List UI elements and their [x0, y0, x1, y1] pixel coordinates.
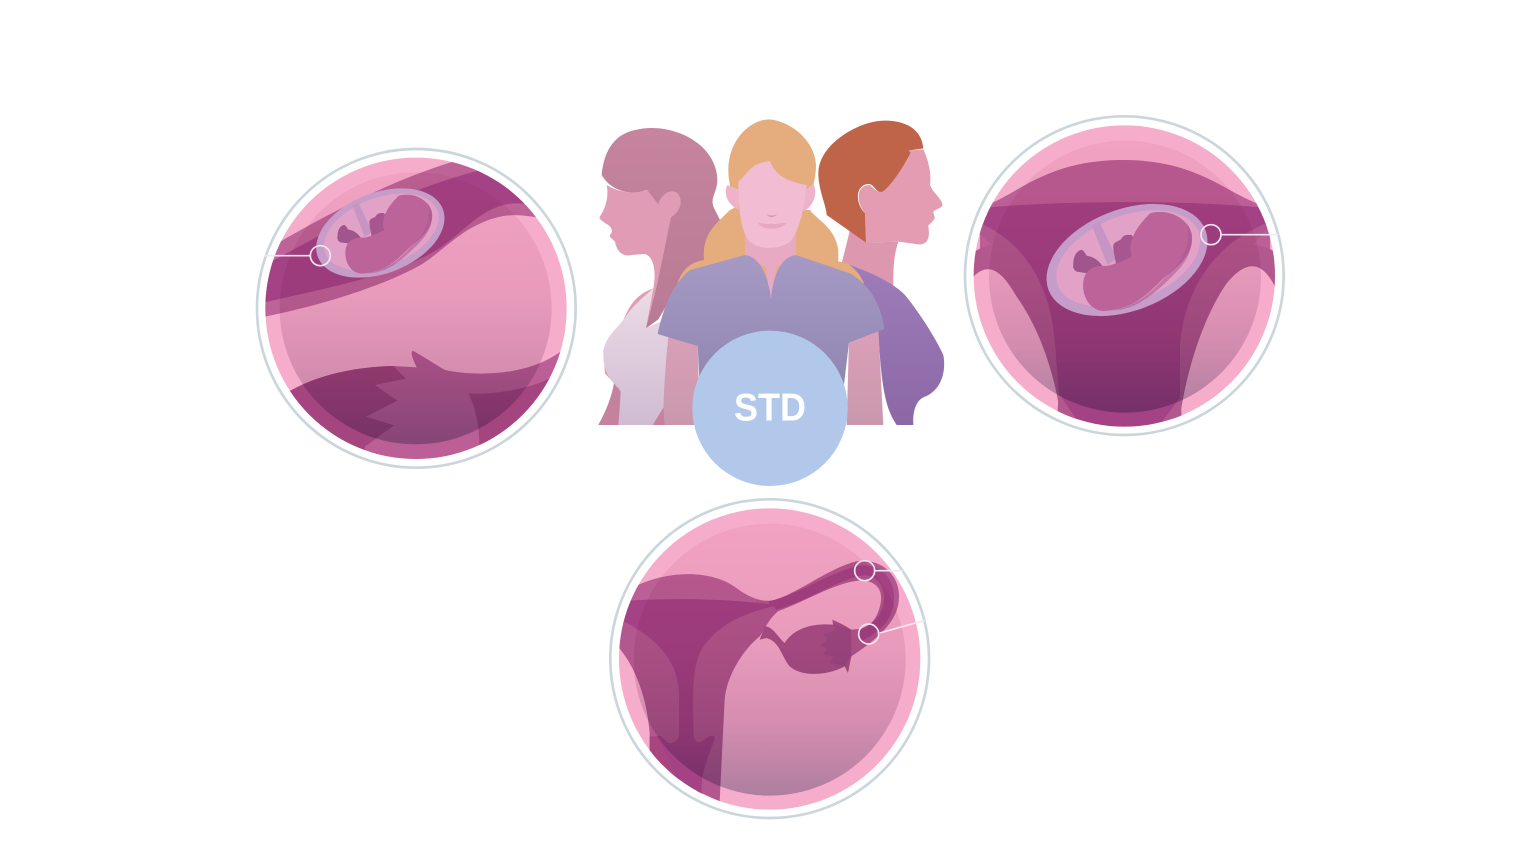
right circle anatomy [967, 160, 1282, 430]
centre neck [745, 230, 796, 298]
callout marker: ovary junction [859, 620, 925, 644]
bottom circle outer ring [610, 499, 929, 818]
right circle shading [989, 141, 1261, 413]
woman on right, profile [818, 121, 944, 425]
right circle pink background [974, 125, 1275, 427]
woman in centre, front [658, 119, 884, 425]
infographic canvas [256, 115, 1285, 820]
callout marker: fallopian tube [855, 561, 903, 581]
left circle shading [280, 172, 552, 444]
left circle pink background [265, 158, 567, 459]
centre ears [726, 184, 815, 212]
left circle outer ring [257, 149, 576, 468]
left circle: pregnancy with ectopic embryo, side view [257, 149, 583, 473]
centre face [738, 161, 807, 248]
centre hair [677, 119, 864, 283]
STD badge: STD [734, 386, 806, 430]
bottom circle pink background [619, 508, 920, 810]
bottom circle: uterus, fallopian tube and ovary [610, 499, 929, 818]
bottom circle shading [634, 524, 906, 796]
centre lips and nose [758, 223, 787, 229]
three women group [598, 119, 944, 425]
embryo in fallopian tube [303, 171, 457, 295]
bottom circle anatomy [616, 561, 899, 801]
centre shirt [658, 255, 884, 390]
woman on left, profile [598, 128, 723, 425]
STD badge [692, 331, 848, 486]
left circle anatomy [265, 162, 560, 459]
left callout marker [265, 246, 330, 266]
embryo in uterus [1030, 183, 1224, 337]
right circle outer ring [965, 116, 1284, 435]
centre arms [664, 328, 883, 425]
right callout marker [1201, 225, 1278, 245]
right circle: embryo in uterus, front view [965, 116, 1284, 435]
